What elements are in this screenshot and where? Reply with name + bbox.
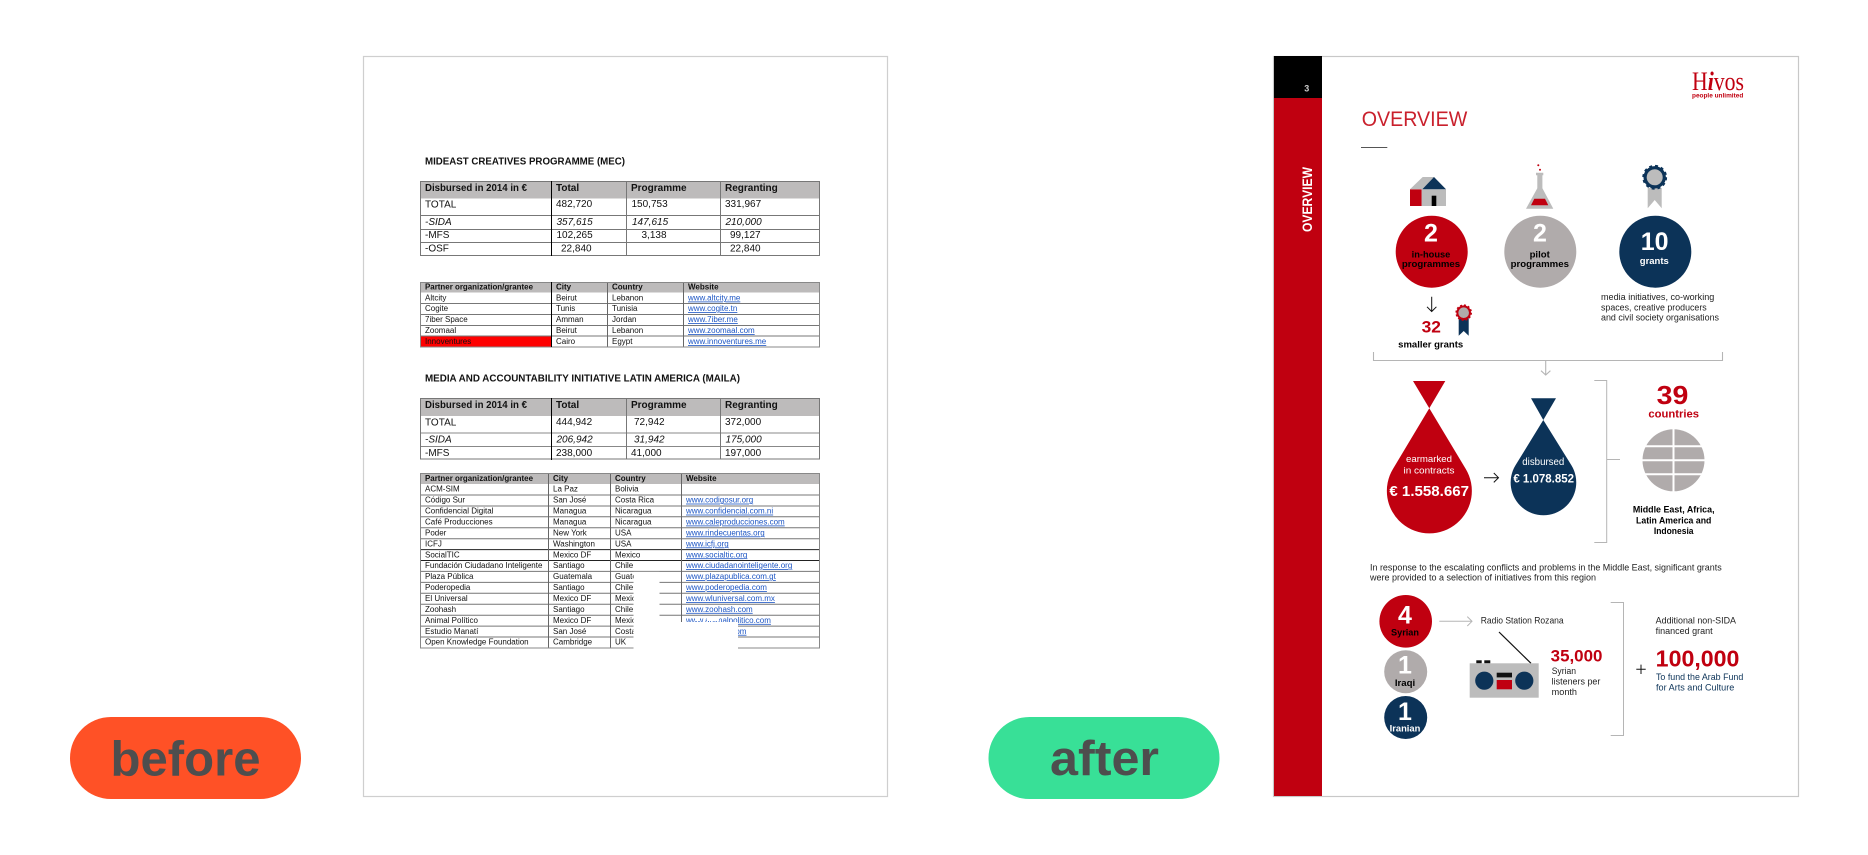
stat: 39 countries [1648,380,1699,421]
text: regions list [1633,505,1715,536]
text: regions list: Middle East, Africa, [1633,505,1715,515]
table: MAILA partner organisations: Nicaragua [615,507,652,516]
drop: disbursed: disbursed [1522,457,1564,468]
bracket: radio grouping [1611,602,1624,736]
icon: globe [1641,428,1706,493]
table: MAILA disbursed funds: Programme [631,400,687,411]
drop: disbursed: € 1.078.852 [1513,473,1574,485]
stat: 2 pilot programmes: 2 [1533,220,1547,248]
table: MAILA disbursed funds: -SIDA [425,434,452,446]
table: MAILA partner organisations: www.wluniversal.com.mx [685,594,775,603]
text: regions list: Indonesia [1654,526,1694,536]
table: MEC partner organisations: Lebanon [612,326,643,335]
table: MAILA partner organisations: San José [553,627,587,636]
table: MEC disbursed funds: 150,753 [632,199,668,210]
table: MEC partner organisations: Beirut [556,294,578,302]
stat: 2 pilot programmes [1504,216,1576,288]
stat: 100,000 additional grant: Additional non-SIDA [1656,615,1736,625]
sidebar: black page number tab: 3 [1304,84,1309,94]
table: MAILA partner organisations: Estudio Manatí [425,627,479,636]
stat: 1 Iranian: Iranian [1390,724,1421,735]
table: MAILA disbursed funds: 238,000 [556,448,593,459]
table: MAILA disbursed funds: -MFS [425,448,450,459]
stat: 2 in-house programmes: in-house [1412,249,1450,260]
table: MEC partner organisations: Tunis [556,304,575,313]
table: MAILA partner organisations: Zoohash [425,605,456,614]
stat: 32 smaller grants: 32 [1422,318,1441,337]
after label pill [988,717,1220,799]
table: MAILA partner organisations: www.codigosur.org [685,496,753,505]
table: MEC partner organisations: Lebanon [612,294,643,302]
table: MEC disbursed funds: 99,127 [730,230,761,241]
stat: 35,000 listeners: month [1552,687,1577,697]
table: MAILA partner organisations: Animal Político [425,616,478,625]
table: MEC disbursed funds: Disbursed in 2014 in € [425,183,527,194]
heading: Media and Accountability Initiative: MEDIA AND ACCOUNTABILITY INITIATIVE LATIN AMERICA (MAILA) [425,374,740,384]
table: MAILA partner organisations: Partner organization/grantee [425,474,534,483]
table: MAILA disbursed funds: 197,000 [725,448,762,459]
icon: red rosette [1456,305,1471,336]
table: MAILA partner organisations: City [553,474,569,483]
table: MAILA disbursed funds: Total [556,400,579,411]
table: MEC disbursed funds: Regranting [725,183,778,194]
table: MAILA partner organisations: Managua [553,507,587,516]
text: regions list: Latin America and [1636,515,1711,525]
table: MAILA partner organisations: Santiago [553,605,585,614]
table: MEC disbursed funds: TOTAL [425,200,457,210]
stat: 2 pilot programmes: programmes [1511,259,1569,270]
table: MEC disbursed funds: 331,967 [725,199,762,210]
table: MAILA partner organisations: Fundación Ciudadano Inteligente [425,561,543,570]
icon: house [1410,177,1446,206]
stat: 35,000 listeners: 35,000 [1551,648,1602,666]
stat: 1 Iraqi [1384,650,1427,693]
table: MAILA partner organisations: www.confidencial.com.ni [685,507,773,516]
table: MAILA partner organisations: Costa Rica [615,627,655,636]
table: MAILA disbursed funds: Disbursed in 2014 in € [425,400,527,411]
table: MAILA disbursed funds: 31,942 [634,434,665,446]
table: MAILA disbursed funds: Regranting [725,400,778,411]
table: MEC disbursed funds: 482,720 [556,199,593,210]
table: MEC disbursed funds: Programme [631,183,687,194]
table: MEC partner organisations: City [556,282,572,292]
table: MEC disbursed funds: 147,615 [632,217,669,228]
table: MAILA partner organisations: Country [615,474,646,483]
sidebar: red section band: OVERVIEW [1300,167,1315,232]
text: grant recipients description: spaces, creative producers [1601,302,1707,312]
table: MAILA partner organisations: USA [615,539,632,548]
arrow: Syrian to radio station [1439,617,1472,626]
table: MEC partner organisations: Cairo [556,337,576,346]
table: MAILA disbursed funds [420,398,820,460]
table: MAILA partner organisations: Costa Rica [615,496,655,505]
table: MAILA partner organisations: www.manati.com [685,627,747,636]
stat: 2 in-house programmes [1396,216,1468,288]
table: MAILA partner organisations: www.rindecuentas.org [685,528,765,537]
table: MEC partner organisations: Website [688,282,719,292]
table: MAILA partner organisations: www.icfj.org [685,539,729,548]
table: MAILA partner organisations: www.caleproducciones.com [685,518,785,526]
table: MEC partner organisations: www.innoventures.me [687,337,767,346]
stat: 4 Syrian: Syrian [1391,628,1419,639]
table: MEC partner organisations: Country [612,282,643,292]
table: MEC partner organisations: www.cogite.tn [687,304,737,313]
stat: 1 Iraqi: Iraqi [1395,678,1415,689]
table: MAILA partner organisations: La Paz [553,485,578,494]
text: grant recipients description: and civil society organisations [1601,312,1720,322]
stat: 1 Iranian [1384,696,1427,739]
before label pill: before [110,732,260,786]
stat: 32 smaller grants [1398,318,1463,349]
stat: 39 countries: countries [1648,409,1699,421]
table: MAILA partner organisations: Mexico DF [553,594,591,603]
table: MAILA partner organisations [420,473,820,650]
table: MEC disbursed funds [420,181,820,256]
table: MAILA partner organisations: Guatemala [615,572,655,581]
table: MEC disbursed funds: -OSF [425,244,449,254]
icon: flask [1526,164,1553,209]
table: MAILA disbursed funds: 372,000 [725,417,762,428]
table: MAILA partner organisations: ICFJ [425,539,442,548]
arrow: programmes to smaller grants [1427,297,1436,312]
stat: 35,000 listeners [1551,648,1602,697]
drop: earmarked in contracts [1387,381,1472,533]
icon: plus [1636,665,1646,674]
stat: 1 Iranian: 1 [1398,698,1412,726]
stat: 35,000 listeners: listeners per [1552,676,1600,686]
table: MAILA partner organisations: Chile [615,583,634,592]
panel: before document page [364,56,888,796]
bracket: all grants merge [1374,352,1722,375]
table: MAILA partner organisations: UK [615,638,627,647]
table: MAILA partner organisations: Mexico [615,594,641,603]
table: MAILA partner organisations: USA [615,528,632,537]
heading: Mideast Creatives Programme: MIDEAST CREATIVES PROGRAMME (MEC) [425,156,625,168]
stat: 2 in-house programmes: 2 [1424,220,1438,248]
table: MEC partner organisations: Partner organization/grantee [425,282,534,292]
text: Middle East intro paragraph: were provided to a selection of initiatives from this region [1369,573,1596,583]
table: MEC partner organisations: www.altcity.me [687,294,741,302]
table: MAILA partner organisations: Cambridge [553,638,593,647]
stat: 10 grants [1619,216,1691,288]
table: MAILA partner organisations: Santiago [553,561,585,570]
table: MAILA partner organisations: SocialTIC [425,550,460,559]
table: MAILA disbursed funds: 41,000 [631,448,662,459]
bracket: disbursed to countries [1594,380,1620,542]
drop: earmarked in contracts: in contracts [1404,465,1455,476]
table: MEC disbursed funds: 357,615 [556,217,593,228]
table: MAILA partner organisations: Mexico DF [553,550,591,559]
stat: 100,000 additional grant: for Arts and Culture [1656,683,1734,693]
table: MAILA partner organisations: Plaza Pública [425,572,474,581]
table: MEC partner organisations: 7iber Space [425,315,468,324]
table: MAILA partner organisations: New York [553,528,588,537]
text: Middle East intro paragraph: In response to the escalating conflicts and problems in the Middle East, significant grants [1370,562,1722,572]
table: MEC partner organisations: Tunisia [612,304,638,313]
stat: 100,000 additional grant: To fund the Arab Fund [1656,672,1743,682]
drop: earmarked in contracts: € 1.558.667 [1389,483,1469,500]
table: MAILA partner organisations: Poder [425,528,447,537]
table: MAILA partner organisations: www.socialtic.org [685,550,747,559]
stat: 4 Syrian [1379,595,1432,648]
table: MAILA partner organisations: Mexico [615,550,641,559]
stat: 10 grants: 10 [1641,228,1669,256]
stat: 2 pilot programmes: pilot [1530,249,1551,260]
table: MAILA partner organisations: Código Sur [425,496,465,505]
table: MEC partner organisations: www.zoomaal.com [687,326,755,335]
table: MAILA disbursed funds: 175,000 [726,434,762,446]
table: MAILA disbursed funds: 444,942 [556,417,593,428]
table: MEC disbursed funds: 22,840 [730,244,761,254]
sidebar: black page number tab [1274,56,1322,98]
table: MEC partner organisations: Jordan [612,315,636,324]
table: MEC partner organisations: Altcity [425,294,446,302]
table: MEC partner organisations [420,282,820,347]
sidebar: red section band [1274,98,1322,796]
stat: 39 countries: 39 [1657,380,1688,410]
logo: Hivos: Hivos [1692,67,1744,96]
table: MAILA partner organisations: Bolivia [615,485,639,494]
stat: 10 grants: grants [1640,256,1669,267]
panel: after report page [1274,56,1798,796]
stat: 35,000 listeners: Syrian [1552,666,1576,676]
title: Overview: OVERVIEW [1362,108,1467,131]
table: MEC disbursed funds: 22,840 [561,244,592,254]
table: MAILA partner organisations: Café Producciones [425,518,493,526]
stat: 32 smaller grants: smaller grants [1398,339,1463,349]
table: MAILA partner organisations: Chile [615,605,634,614]
table: MAILA partner organisations: Nicaragua [615,518,652,526]
table: MAILA partner organisations: El Universal [425,594,468,603]
table: MAILA partner organisations: Poderopedia [425,583,471,592]
stat: 2 in-house programmes: programmes [1402,259,1460,270]
table: MEC partner organisations: Cogite [425,304,449,313]
table: MAILA disbursed funds: 206,942 [556,434,593,446]
table: MAILA partner organisations: www.plazapublica.com.gt [685,572,777,581]
table: MAILA partner organisations: Confidencial Digital [425,507,494,516]
table: MAILA partner organisations: www.ciudadanointeligente.org [685,561,792,570]
table: MAILA partner organisations: www.poderopedia.com [685,583,767,592]
table: MEC disbursed funds: 210,000 [724,217,762,228]
icon: navy rosette [1643,166,1666,208]
stat: 1 Iraqi: 1 [1398,651,1412,679]
table: MAILA partner organisations: Santiago [553,583,585,592]
stat: 100,000 additional grant: 100,000 [1656,646,1739,672]
arrow: earmarked to disbursed [1484,473,1498,482]
table: MEC disbursed funds: Total [556,183,579,194]
table: MEC partner organisations: Amman [556,315,584,324]
table: MAILA partner organisations: San José [553,496,587,505]
stat: 100,000 additional grant: financed grant [1656,626,1713,636]
after label pill: after [1050,732,1159,786]
text: grant recipients description: media initiatives, co-working [1601,292,1714,302]
text: grant recipients description [1601,292,1720,322]
stat: 4 Syrian: 4 [1398,601,1412,629]
before label pill [70,717,301,799]
table: MEC disbursed funds: 3,138 [642,230,667,241]
drop: disbursed [1511,398,1576,515]
logo: Hivos: people unlimited [1692,92,1743,99]
table: MEC partner organisations: Egypt [612,337,633,346]
table: MEC partner organisations: Innoventures [425,337,471,346]
table: MAILA partner organisations: Chile [615,561,634,570]
table: MAILA partner organisations: www.zoohash.com [685,605,753,614]
table: MAILA partner organisations: ACM-SIM [425,485,460,494]
table: MAILA disbursed funds: TOTAL [425,418,457,428]
table: MEC partner organisations: Zoomaal [425,326,456,335]
table: MAILA partner organisations: Mexico [615,616,641,625]
table: MAILA partner organisations: www.animalpolitico.com [685,616,771,625]
table: MAILA partner organisations: Guatemala [553,572,593,581]
table: MAILA partner organisations: Website [686,474,717,483]
drop: earmarked in contracts: earmarked [1406,454,1452,465]
table: MAILA partner organisations: Mexico DF [553,616,591,625]
icon: radio [1470,632,1539,698]
stat: 100,000 additional grant [1656,615,1743,693]
table: MEC partner organisations: www.7iber.me [687,315,738,324]
text: Middle East intro paragraph [1369,562,1722,583]
table: MAILA partner organisations: Managua [553,518,587,526]
table: MAILA partner organisations: Washington [553,539,595,548]
table: MEC disbursed funds: -SIDA [425,217,452,228]
table: MEC disbursed funds: 102,265 [556,230,593,241]
table: MEC partner organisations: Beirut [556,326,578,335]
table: MAILA partner organisations: Open Knowledge Foundation [425,638,529,647]
table: MEC disbursed funds: -MFS [425,230,450,241]
table: MAILA disbursed funds: 72,942 [634,417,665,428]
text: Radio Station Rozana: Radio Station Rozana [1481,615,1564,625]
